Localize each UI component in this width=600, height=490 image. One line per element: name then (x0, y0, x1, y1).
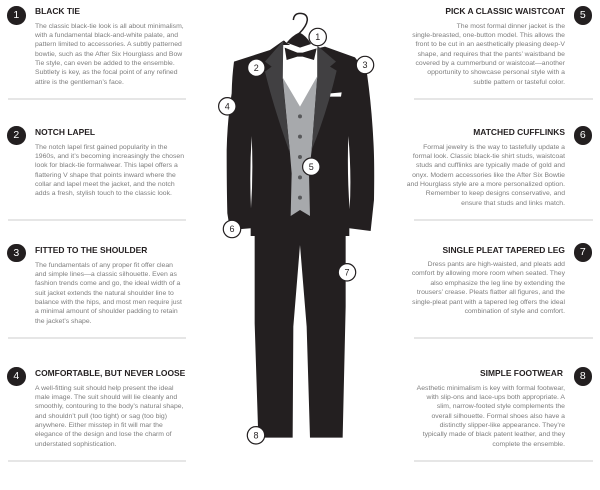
text block: attire is the gentleman’s face. (35, 79, 124, 86)
panel: matched cufflinks (407, 126, 593, 221)
callout 7: 7 (344, 268, 350, 278)
text block: comfort by allowing more room when seated. They (412, 270, 565, 277)
text block: covered by a cummerbund or waistcoat—another (416, 60, 565, 67)
badge 4 (7, 367, 26, 386)
text block: A well-fitting suit should help present the ideal (35, 384, 173, 392)
text block: single-pleat pant with a tapered leg offers the ideal (412, 298, 565, 306)
text block: subtle pattern or tasteful color. (473, 79, 565, 86)
text block: The notch lapel first gained popularity in the (35, 144, 167, 150)
badge 3: 3 (13, 246, 19, 258)
badge 5: 5 (580, 9, 586, 21)
text block: with a fundamental black-and-white palate, and (35, 32, 178, 39)
text block (407, 144, 565, 207)
badge 5 (574, 6, 592, 24)
text block: also emphasize the leg line by extending the (430, 280, 565, 287)
callouts (219, 28, 374, 444)
badge 4: 4 (13, 370, 19, 382)
text block: anywhere. Either misstep in fit will mar the (35, 422, 163, 429)
heading: PICK A CLASSIC WAISTCOAT (445, 6, 565, 16)
text block: Aesthetic minimalism is key with formal footwear, (417, 384, 565, 392)
panel: notch lapel (7, 126, 186, 221)
text block: 1960s, and it’s becoming increasingly the chosen (35, 153, 184, 160)
text block: The fundamentals of any proper fit offer clean (35, 262, 173, 268)
text block: trousers’ crease. Pleats flatter all figures, and the (417, 289, 565, 296)
text block: typically made of black patent leather, and they (423, 431, 565, 438)
text block: Tie style, can even be added to the ensemble. (35, 60, 175, 67)
trousers (255, 236, 346, 438)
side vents (250, 136, 350, 209)
callout 5: 5 (309, 162, 314, 172)
text block: and shouldn’t pull (too tight) or sag (too big) (35, 413, 167, 420)
panel: black tie (7, 6, 186, 100)
text block: balance with the hips, and most men require just (35, 299, 182, 306)
text block: front to be cut in an aesthetically pleasing deep-V (415, 41, 565, 48)
text block: slim, narrow-footed style complements the (437, 403, 565, 410)
text block (35, 262, 182, 325)
badge 2: 2 (13, 129, 19, 141)
text block: male image. The suit should will lie cleanly and (35, 394, 177, 401)
jacket (227, 41, 374, 236)
text block: shape, and requires that the pants’ waistband be (418, 51, 565, 58)
text block (416, 384, 565, 448)
text block: onyx. Modern accessories like the After Six Bowtie (412, 172, 565, 179)
text block: combination of style and comfort. (465, 308, 565, 315)
panel: comfortable, but never loose (7, 367, 186, 462)
text block: adds a fresh, stylish touch to the classic look. (35, 190, 172, 197)
callout 2 (248, 59, 265, 76)
badge 3 (7, 244, 26, 262)
callout 7 (338, 264, 356, 281)
badge 2 (7, 126, 26, 144)
callout 2: 2 (254, 63, 259, 73)
callout 4 (219, 98, 236, 115)
badge 1: 1 (13, 9, 19, 21)
text block: Subtlety is key, as the focal point of any refined (35, 69, 178, 76)
text block: overall silhouette. Formal shoes also have a (431, 413, 565, 420)
text block: suit jacket extends the natural shoulder line to (35, 290, 174, 297)
text block: The classic black-tie look is all about minimalism, (35, 22, 184, 30)
shirt front (283, 45, 317, 108)
badge 7 (574, 243, 592, 262)
panel: pick a classic waistcoat (412, 6, 593, 100)
heading: NOTCH LAPEL (35, 127, 95, 137)
hanger (287, 32, 311, 48)
text block: flattering V shape that points inward where the (35, 172, 176, 179)
text block: and simple lines—a classic silhouette. Even as (35, 271, 177, 278)
text block: the jacket’s shape. (35, 318, 92, 325)
heading: COMFORTABLE, BUT NEVER LOOSE (35, 368, 185, 378)
text block: Remember to keep designs conservative, and (426, 190, 565, 197)
text block: pattern limited to accessories. A subtly patterned (35, 41, 182, 48)
callout 6 (223, 220, 241, 238)
text block: and Hourglass style are a more personalized option. (407, 181, 565, 188)
text block: studs and cufflinks are typically made of gold and (416, 162, 565, 169)
text block: look for black-tie formalwear. This lapel offers a (35, 162, 178, 169)
callout 6: 6 (229, 224, 235, 234)
text block (412, 261, 565, 315)
badge 8: 8 (580, 370, 586, 382)
callout 1: 1 (315, 32, 320, 42)
text block: with slip-ons and lace-ups both appropriate. A (427, 394, 565, 401)
text block: bowtie, such as the After Six Hourglass and Bow (35, 51, 182, 58)
text block: a minimal amount of shoulder padding to retain (35, 308, 178, 315)
text block: ensure that studs and links match. (461, 200, 565, 207)
bow tie (285, 48, 317, 60)
text block: distinctly slipper-like appearance. They’re (440, 422, 565, 429)
heading: BLACK TIE (35, 6, 80, 16)
callout 1 (309, 28, 326, 46)
text block (412, 22, 565, 86)
badge 7: 7 (580, 246, 586, 258)
badge 8 (574, 367, 592, 386)
text block: The most formal dinner jacket is the (457, 22, 565, 30)
waistcoat (283, 76, 317, 216)
callout 8: 8 (253, 430, 259, 440)
callout 3 (356, 56, 374, 74)
text block: fashion trends come and go, the ideal width of a (35, 280, 180, 287)
waistcoat buttons (298, 114, 302, 200)
heading: SIMPLE FOOTWEAR (480, 368, 563, 378)
lapels (265, 41, 337, 153)
heading: MATCHED CUFFLINKS (473, 127, 565, 137)
heading: FITTED TO THE SHOULDER (35, 245, 147, 255)
callout 8 (247, 427, 265, 444)
text block: single-breasted, one-button model. This allows the (412, 32, 565, 39)
text block: Formal jewelry is the way to tastefully update a (423, 144, 565, 150)
collar band (285, 41, 316, 50)
hanger hook (293, 13, 307, 33)
callout 3: 3 (362, 60, 368, 70)
heading: SINGLE PLEAT TAPERED LEG (442, 245, 565, 255)
panel: simple footwear (414, 367, 593, 462)
badge 6: 6 (580, 129, 586, 141)
badge 1 (7, 6, 26, 24)
callout 5 (303, 158, 320, 175)
text block: understated sophistication. (35, 441, 116, 448)
pocket square (330, 92, 342, 97)
text block: formal look. Classic black-tie shirt studs, waistcoat (413, 153, 565, 160)
text block: opportunity to showcase personal style with a (427, 69, 565, 76)
text block: complete the ensemble. (492, 441, 565, 448)
text block: Dress pants are high-waisted, and pleats add (428, 261, 565, 268)
badge 6 (574, 126, 592, 144)
text block (35, 144, 184, 197)
text block: collar and lapel meet the jacket, and the notch (35, 181, 175, 188)
callout 4: 4 (225, 102, 230, 112)
text block (35, 22, 184, 86)
text block (35, 384, 184, 448)
text block: smoothly, contouring to the body’s natural shape, (35, 403, 184, 410)
text block: elegance of the design and lose the charm of (35, 431, 172, 438)
panel: fitted to the shoulder (7, 244, 186, 339)
panel: single pleat tapered leg (412, 243, 593, 339)
